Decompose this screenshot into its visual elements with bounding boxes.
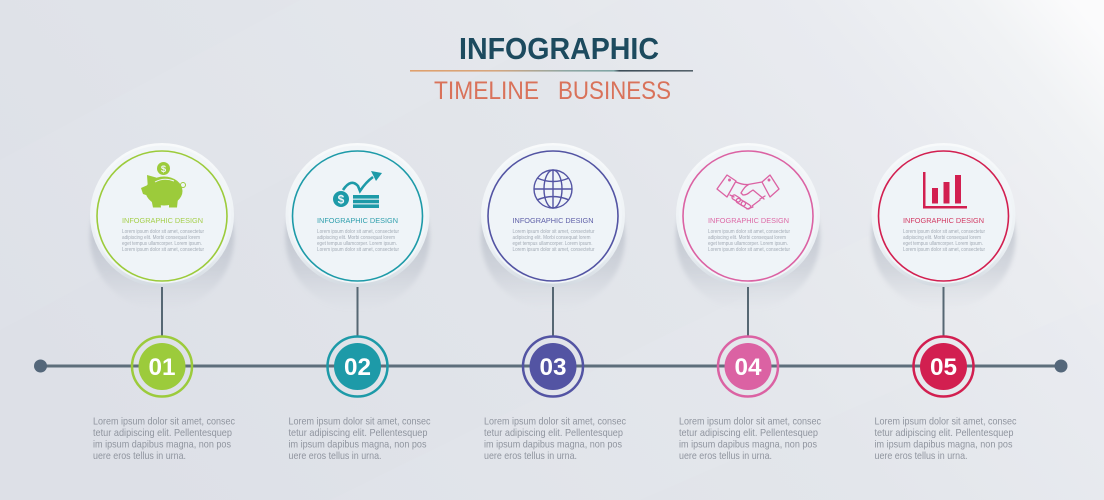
icon: piggy bank	[141, 162, 186, 208]
subheading: BUSINESS	[558, 77, 671, 105]
description: Lorem ipsum dolor sit amet, consec	[93, 416, 235, 428]
circle text: Lorem ipsum dolor sit amet, consectetur	[317, 229, 399, 235]
step 4	[676, 143, 821, 462]
circle text: Lorem ipsum dolor sit amet, consectetur	[708, 247, 790, 253]
description: uere eros tellus in urna.	[874, 450, 968, 462]
number badge	[523, 336, 583, 396]
circle text: eget tempus ullamcorper. Lorem ipsum.	[708, 241, 788, 247]
description: im ipsum dapibus magna, non pos	[93, 438, 231, 450]
icon: piggy bank: $	[161, 164, 167, 175]
description	[288, 416, 430, 462]
description: Lorem ipsum dolor sit amet, consec	[484, 416, 626, 428]
description: tetur adipiscing elit. Pellentesquep	[93, 427, 232, 439]
circle text: Lorem ipsum dolor sit amet, consectetur	[708, 229, 790, 235]
disc: step 3	[481, 143, 625, 310]
icon: coin, stack and growth arrow	[333, 171, 382, 208]
stem	[161, 287, 163, 336]
circle text: eget tempus ullamcorper. Lorem ipsum.	[512, 241, 592, 247]
circle text: adipiscing elit. Morbi consequat lorem	[317, 235, 395, 241]
circle text	[512, 229, 595, 253]
step 2	[286, 143, 430, 462]
description: Lorem ipsum dolor sit amet, consec	[874, 416, 1016, 428]
circle heading: INFOGRAPHIC DESIGN	[512, 216, 594, 225]
circle text	[317, 229, 399, 253]
circle text: eget tempus ullamcorper. Lorem ipsum.	[317, 241, 397, 247]
circle heading: INFOGRAPHIC DESIGN	[122, 216, 203, 225]
circle text: adipiscing elit. Morbi consequat lorem	[512, 235, 590, 241]
disc: step 5	[872, 143, 1016, 310]
circle text: Lorem ipsum dolor sit amet, consectetur	[903, 229, 985, 235]
description: tetur adipiscing elit. Pellentesquep	[484, 427, 623, 439]
stem	[942, 287, 944, 336]
title block	[410, 31, 693, 105]
circle text: adipiscing elit. Morbi consequat lorem	[122, 235, 200, 241]
description: im ipsum dapibus magna, non pos	[679, 438, 817, 450]
number badge	[328, 336, 388, 396]
number badge: 02	[344, 354, 371, 381]
circle text: Lorem ipsum dolor sit amet, consectetur	[512, 229, 595, 235]
step 5	[872, 143, 1016, 462]
description: im ipsum dapibus magna, non pos	[874, 438, 1012, 450]
circle text	[122, 229, 204, 253]
circle heading: INFOGRAPHIC DESIGN	[708, 216, 789, 225]
icon: coin, stack and growth arrow: $	[338, 192, 345, 206]
description: im ipsum dapibus magna, non pos	[484, 438, 622, 450]
circle text: Lorem ipsum dolor sit amet, consectetur	[317, 247, 399, 253]
circle text: Lorem ipsum dolor sit amet, consectetur	[122, 247, 204, 253]
step 1	[90, 143, 235, 462]
description: uere eros tellus in urna.	[93, 450, 186, 462]
disc: step 4	[676, 143, 820, 310]
circle text	[708, 229, 790, 253]
disc: step 1	[90, 143, 234, 310]
circle text: adipiscing elit. Morbi consequat lorem	[903, 235, 981, 241]
circle text: eget tempus ullamcorper. Lorem ipsum.	[122, 241, 202, 247]
description	[679, 416, 821, 462]
circle text: Lorem ipsum dolor sit amet, consectetur	[903, 247, 985, 253]
icon: globe	[534, 170, 572, 208]
description: tetur adipiscing elit. Pellentesquep	[874, 427, 1014, 439]
description: Lorem ipsum dolor sit amet, consec	[679, 416, 821, 428]
circle text: adipiscing elit. Morbi consequat lorem	[708, 235, 786, 241]
number badge	[132, 336, 192, 396]
icon: bar chart	[923, 172, 967, 208]
number badge: 04	[734, 354, 762, 381]
icon: handshake	[717, 175, 779, 210]
timeline axis	[34, 360, 1068, 372]
number badge	[718, 336, 778, 396]
heading: INFOGRAPHIC	[459, 31, 659, 66]
stem	[747, 287, 749, 336]
number badge	[914, 336, 974, 396]
circle text	[903, 229, 985, 253]
circle heading: INFOGRAPHIC DESIGN	[903, 216, 984, 225]
description: uere eros tellus in urna.	[679, 450, 772, 462]
description: Lorem ipsum dolor sit amet, consec	[288, 416, 430, 428]
circle text: eget tempus ullamcorper. Lorem ipsum.	[903, 241, 983, 247]
circle text: Lorem ipsum dolor sit amet, consectetur	[122, 229, 204, 235]
number badge: 05	[930, 354, 957, 381]
description: im ipsum dapibus magna, non pos	[288, 438, 426, 450]
description: uere eros tellus in urna.	[288, 450, 382, 462]
step 3	[481, 143, 626, 462]
description: tetur adipiscing elit. Pellentesquep	[288, 427, 428, 439]
heading rule	[410, 70, 693, 72]
circle heading: INFOGRAPHIC DESIGN	[317, 216, 398, 225]
description: tetur adipiscing elit. Pellentesquep	[679, 427, 818, 439]
subheading	[434, 77, 671, 105]
number badge: 03	[540, 354, 566, 381]
description: uere eros tellus in urna.	[484, 450, 577, 462]
subheading: TIMELINE	[434, 77, 539, 105]
stem	[356, 287, 358, 336]
description	[93, 416, 235, 462]
description	[484, 416, 626, 462]
circle text: Lorem ipsum dolor sit amet, consectetur	[512, 247, 595, 253]
stem	[552, 287, 554, 336]
disc: step 2	[286, 143, 430, 310]
description	[874, 416, 1016, 462]
number badge: 01	[148, 354, 176, 381]
